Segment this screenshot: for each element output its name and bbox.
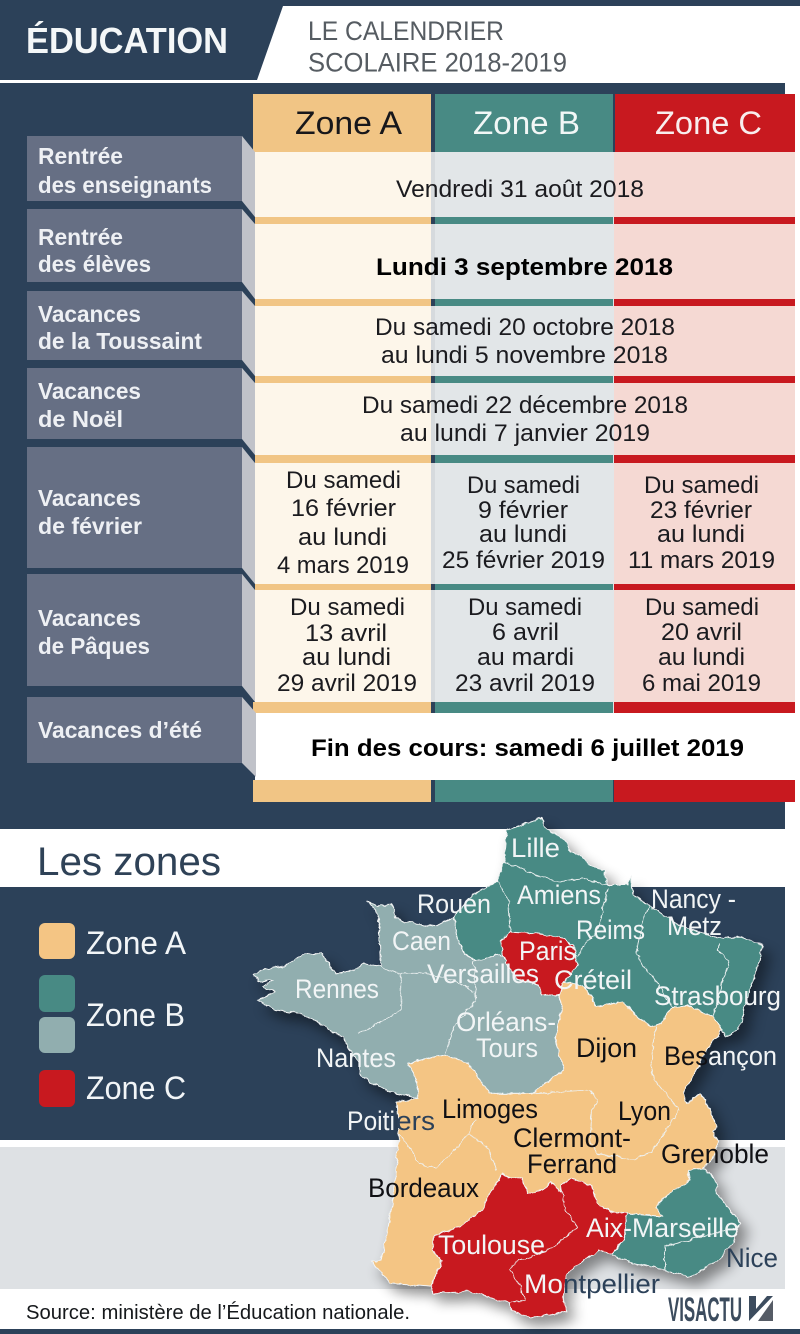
février zone C: 11 mars 2019 [628, 547, 775, 574]
label: Poitiers: ers [396, 1106, 435, 1136]
legend: zone A: Zone A [86, 925, 187, 961]
row: Noël dates [362, 392, 688, 447]
legend: zone B: Zone B [86, 997, 185, 1033]
zone B dark regions north [454, 817, 763, 1037]
label: Caen: Caen [392, 926, 451, 956]
zone B light regions [254, 902, 563, 1098]
icon: VISACTU mark [749, 1296, 773, 1321]
subtitle: LE CALENDRIER [308, 16, 504, 46]
row label boxes [27, 136, 256, 777]
label: vacances de Pâques [38, 605, 150, 659]
zone column headers: Zone B [473, 105, 580, 141]
Pâques zone B: 6 avril [492, 619, 559, 646]
subtitle [308, 16, 567, 78]
heading: les zones: Les zones [37, 840, 221, 884]
label: rentrée des enseignants: Rentrée [38, 143, 123, 169]
label: vacances d'été: Vacances d’été [38, 717, 202, 743]
Pâques zone A: 13 avril [305, 620, 387, 647]
label: Nantes: Nantes [316, 1043, 396, 1073]
février zone A: 16 février [291, 495, 396, 522]
février zone A: au lundi [298, 524, 387, 551]
Pâques zone C: Du samedi [645, 594, 759, 621]
row: février dates [277, 467, 775, 579]
label: Montpellier: ntpellier [563, 1269, 660, 1299]
février zone C [628, 472, 775, 574]
label: Toulouse: Toulouse [438, 1230, 545, 1260]
label: rentrée des élèves [38, 224, 151, 277]
row separator bars [253, 217, 795, 802]
label: vacances de Pâques: de Pâques [38, 633, 150, 659]
label: Orléans-Tours: Orléans- [456, 1007, 556, 1037]
label: vacances de la Toussaint [38, 301, 202, 354]
label: rentrée des élèves: Rentrée [38, 224, 123, 250]
label: Nice: Nice [726, 1243, 778, 1273]
row: rentrée des élèves date: Lundi 3 septembre 2018 [376, 254, 673, 281]
panel: calendar table [0, 83, 795, 829]
label: Montpellier [524, 1269, 660, 1299]
label: vacances de Pâques: Vacances [38, 605, 141, 631]
label: Montpellier: Mo [524, 1269, 563, 1299]
label: Poitiers [347, 1106, 435, 1136]
row: Toussaint dates: Du samedi 20 octobre 2018 [375, 314, 675, 341]
label: Clermont-Ferrand: Ferrand [527, 1149, 617, 1179]
label: vacances de février [38, 485, 142, 539]
label: rentrée des élèves: des élèves [38, 251, 151, 277]
label: Rouen: Rouen [417, 889, 491, 919]
legend: zone C [39, 1070, 186, 1107]
février zone B: Du samedi [467, 472, 580, 499]
Pâques zone B: au mardi [477, 644, 574, 671]
zone A region [372, 983, 722, 1287]
row: rentrée des enseignants date: Vendredi 31 août 2018 [396, 176, 644, 203]
label: rentrée des enseignants [38, 143, 212, 198]
label: Grenoble: Grenoble [661, 1139, 769, 1169]
label: Strasbourg: Strasbourg [654, 981, 781, 1011]
février zone B [442, 472, 605, 574]
label: Dijon: Dijon [576, 1033, 637, 1063]
label: vacances de Noël [38, 378, 141, 432]
footer band [0, 1329, 800, 1334]
zone column headers [253, 94, 795, 152]
label: Clermont-Ferrand [513, 1123, 631, 1179]
label: Orléans-Tours: Tours [476, 1033, 538, 1063]
Pâques zone C: au lundi [658, 644, 745, 671]
label: Besançon: ançon [708, 1041, 777, 1071]
label: Poitiers: Poiti [347, 1106, 395, 1136]
label: Nancy-Metz: Nancy - [651, 884, 736, 914]
panel: map grey background [0, 1147, 785, 1289]
label: Nancy-Metz: Metz [667, 911, 722, 941]
Pâques zone A [277, 594, 417, 697]
legend: zone C: Zone C [86, 1070, 186, 1106]
Pâques zone A: Du samedi [290, 594, 405, 621]
février zone A: 4 mars 2019 [277, 552, 409, 579]
label: vacances de la Toussaint: Vacances [38, 301, 141, 327]
legend: zone B [39, 975, 185, 1053]
label: Rennes: Rennes [295, 974, 379, 1004]
février zone A: Du samedi [286, 467, 401, 494]
Pâques zone C: 6 mai 2019 [642, 670, 761, 697]
Pâques zone A: au lundi [302, 644, 391, 671]
map labels [295, 833, 781, 1299]
row: Noël dates: au lundi 7 janvier 2019 [400, 420, 650, 447]
row: fin des cours: Fin des cours: samedi 6 juillet 2019 [311, 735, 744, 762]
label: vacances de Noël: de Noël [38, 406, 123, 432]
source note: Source: ministère de l’Éducation nationale. [26, 1301, 410, 1324]
label: Nancy-Metz [651, 884, 736, 941]
février zone C: 23 février [650, 497, 752, 524]
zone C region Paris [501, 932, 577, 995]
février zone B: 25 février 2019 [442, 547, 605, 574]
février zone C: Du samedi [644, 472, 759, 499]
février zone A [277, 467, 409, 579]
label: rentrée des enseignants: des enseignants [38, 172, 212, 198]
map of France academies [254, 817, 763, 1318]
label: Clermont-Ferrand: Clermont- [513, 1123, 631, 1153]
label: Versailles: Versailles [427, 959, 539, 989]
zone column headers: Zone A [295, 105, 403, 141]
label: Besançon: Bes [664, 1041, 708, 1071]
table cell backgrounds [255, 152, 795, 780]
subtitle: SCOLAIRE 2018-2019 [308, 48, 567, 78]
zone C region south [431, 1173, 626, 1318]
zone B region PACA [611, 1168, 740, 1277]
Pâques zone B [455, 594, 595, 697]
title: ÉDUCATION [26, 20, 228, 61]
label: Bordeaux: Bordeaux [368, 1173, 479, 1203]
label: Aix-Marseille: Aix-Marseille [586, 1213, 739, 1243]
Pâques zone B: Du samedi [468, 594, 582, 621]
row: Toussaint dates [375, 314, 675, 369]
label: vacances de la Toussaint: de la Toussaint [38, 328, 202, 354]
Pâques zone C: 20 avril [661, 619, 742, 646]
label: vacances de février: de février [38, 513, 142, 539]
Pâques zone B: 23 avril 2019 [455, 670, 595, 697]
row: Noël dates: Du samedi 22 décembre 2018 [362, 392, 688, 419]
label: Paris: Paris [519, 936, 576, 966]
zone column headers: Zone C [655, 105, 762, 141]
février zone B: 9 février [478, 497, 568, 524]
label: Lille: Lille [511, 833, 560, 863]
header band [0, 0, 800, 80]
Pâques zone A: 29 avril 2019 [277, 670, 417, 697]
label: Lyon: Lyon [618, 1096, 671, 1126]
février zone B: au lundi [479, 521, 567, 548]
row: Pâques dates [277, 594, 761, 697]
label: vacances de février: Vacances [38, 485, 141, 511]
label: Amiens: Amiens [517, 880, 601, 910]
legend: zone A [39, 923, 187, 961]
label: Besançon [664, 1041, 777, 1071]
legend [39, 923, 187, 1107]
label: Limoges: Limoges [442, 1094, 538, 1124]
row: Toussaint dates: au lundi 5 novembre 2018 [381, 342, 668, 369]
label: Créteil: Créteil [554, 965, 632, 995]
février zone C: au lundi [657, 521, 745, 548]
label: Orléans-Tours [456, 1007, 556, 1063]
panel: map navy background [0, 887, 785, 1140]
label: Reims: Reims [576, 915, 645, 945]
Pâques zone C [642, 594, 761, 697]
label: vacances de Noël: Vacances [38, 378, 141, 404]
